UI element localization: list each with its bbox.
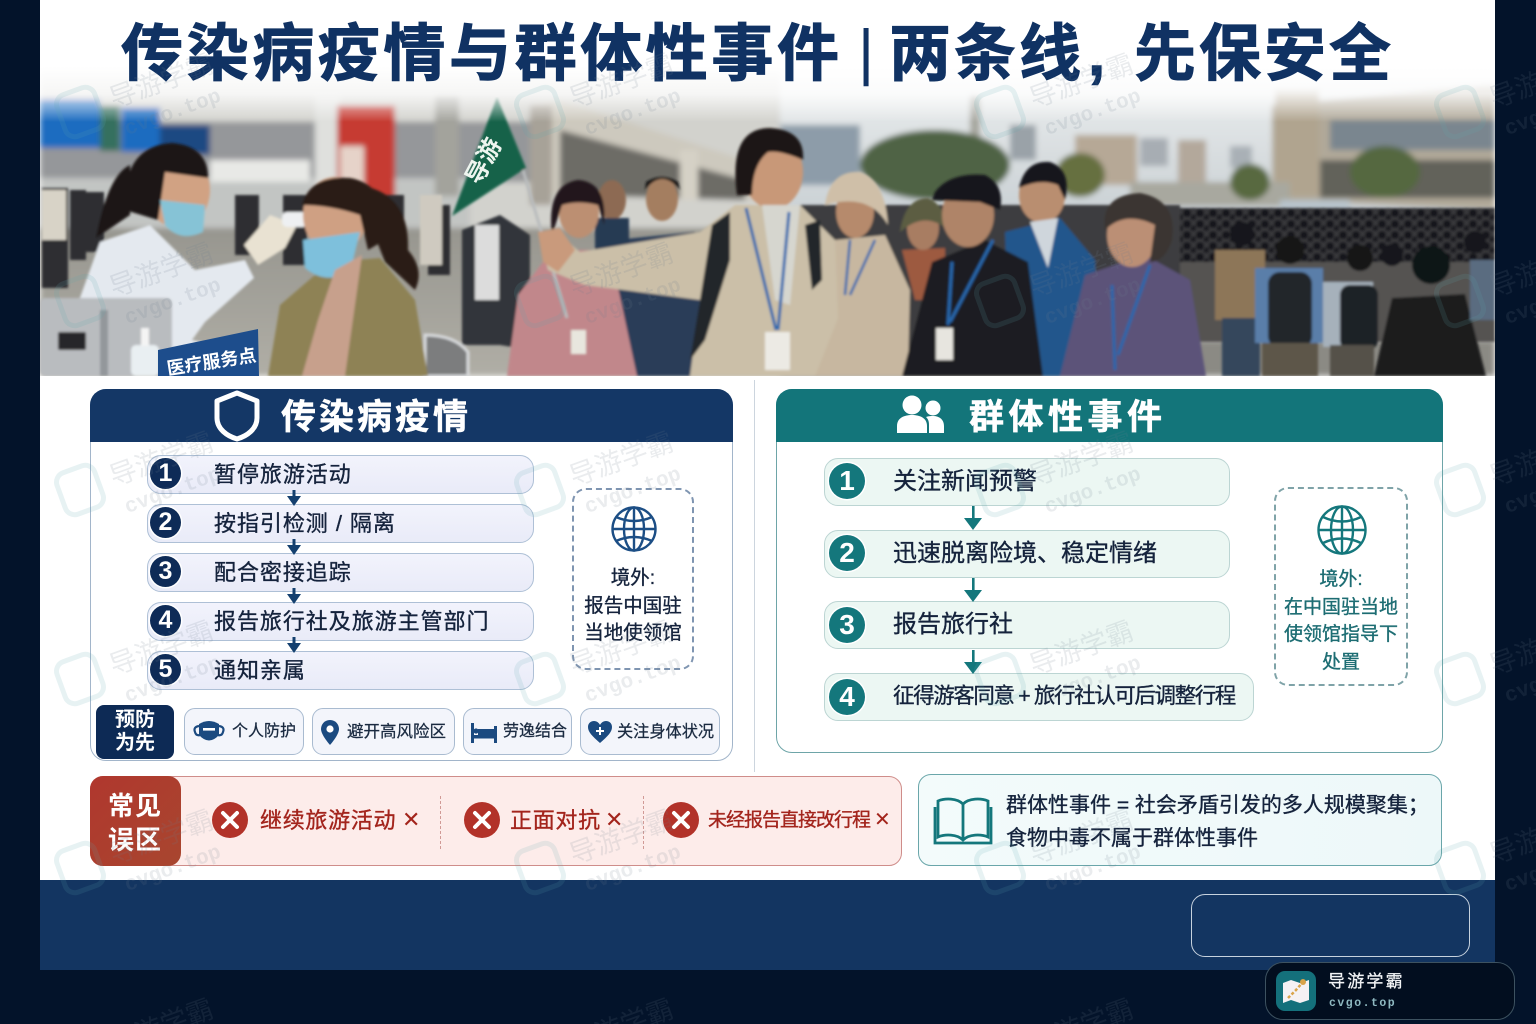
overseas text: 报告中国驻 [584, 594, 682, 616]
panel: definition note [918, 774, 1442, 866]
flag pole and cloth [520, 160, 567, 318]
step 5 number [150, 654, 181, 685]
red banner [337, 105, 395, 205]
step 4 number [829, 679, 865, 715]
step 4 [147, 602, 534, 641]
interior background [40, 66, 780, 376]
step list: group incidents [824, 458, 1254, 721]
definition text [1006, 794, 1429, 850]
watermark layer: cvgo.top [122, 464, 225, 520]
step 1 number: 1 [839, 465, 855, 496]
overseas text [1284, 568, 1398, 672]
heading: group incidents: 群体性事件 [969, 398, 1167, 437]
brand name: 导游学霸 [1328, 972, 1405, 991]
step 3: 报告旅行社 [893, 611, 1013, 638]
watermark layer: 导游学霸 [566, 49, 677, 114]
footer band [40, 880, 1495, 970]
step 5 number: 5 [159, 655, 172, 683]
watermark layer: 导游学霸 [106, 805, 217, 870]
chip: avoid risk areas: 避开高风险区 [347, 723, 446, 741]
mistake 1 [212, 802, 420, 838]
step 4 [824, 673, 1254, 721]
step 4: 报告旅行社及旅游主管部门 [214, 609, 489, 634]
watermark layer: 导游学霸 [106, 238, 217, 303]
outdoor sky and skyline [780, 66, 1495, 216]
step 1 [147, 455, 534, 494]
step 3 number [150, 556, 181, 587]
step 1 number: 1 [159, 459, 172, 487]
step 4 number: 4 [839, 681, 855, 712]
chip: avoid risk areas [312, 708, 455, 755]
canopy [530, 100, 775, 200]
step 1: 关注新闻预警 [893, 468, 1037, 495]
step 4 number [150, 605, 181, 636]
watermark layer: cvgo.top [1042, 653, 1145, 709]
watermark layer: cvgo.top [582, 464, 685, 520]
step list: infectious disease [147, 455, 534, 690]
step 2 number [829, 535, 865, 571]
dashed dividers [440, 796, 441, 849]
heading: infectious disease: 传染病疫情 [281, 398, 471, 437]
step 3: 配合密接追踪 [214, 560, 352, 585]
step 1: 暂停旅游活动 [214, 462, 352, 487]
title: | [858, 18, 874, 87]
watermark layer: cvgo.top [582, 653, 685, 709]
definition text: 食物中毒不属于群体性事件 [1006, 827, 1258, 850]
watermark layer: 导游学霸 [106, 616, 217, 681]
title: 两条线 [889, 20, 1084, 89]
top fade into white [40, 66, 1495, 122]
distant crowd [1160, 208, 1495, 268]
centre divider [754, 380, 755, 772]
mistake 1: 继续旅游活动 [260, 808, 396, 833]
step 2 number [150, 507, 181, 538]
icon: bed [471, 723, 497, 743]
definition text: 群体性事件 = 社会矛盾引发的多人规模聚集； [1006, 794, 1429, 817]
chip: personal protection: 个人防护 [232, 723, 296, 740]
step 2: 按指引检测 / 隔离 [214, 511, 396, 536]
step 5: 通知亲属 [214, 658, 306, 683]
icon: globe [1317, 505, 1367, 555]
chip: watch health: 关注身体状况 [617, 723, 714, 741]
flag text: 导游 [461, 134, 508, 189]
arrows between steps [287, 490, 301, 653]
mistakes label: 误区 [108, 824, 162, 854]
mistake 3 [663, 802, 891, 838]
title: 先保安全 [1134, 20, 1394, 89]
mistakes label [90, 776, 180, 866]
chip: balance work and rest [463, 708, 572, 755]
medical sign [158, 329, 259, 379]
prevention label: 为先 [115, 732, 155, 754]
icon: location pin [321, 720, 339, 745]
step 4 number: 4 [159, 606, 172, 634]
overseas text: 使领馆指导下 [1284, 624, 1398, 645]
interior bystanders [42, 188, 450, 288]
icon: cross [212, 802, 248, 838]
panel: common mistakes [90, 776, 902, 866]
watermark layer: 导游学霸 [566, 427, 677, 492]
tour guide [540, 205, 905, 376]
watermark layer: cvgo.top [122, 86, 225, 142]
chair [425, 335, 468, 376]
title [121, 18, 1394, 89]
watermark layer: cvgo.top [122, 842, 225, 898]
watermark layer: 导游学霸 [106, 49, 217, 114]
watermark layer: cvgo.top [582, 275, 685, 331]
icon: cross [464, 802, 500, 838]
watermark layer: 导游学霸 [1026, 616, 1137, 681]
back-facing crowd [1215, 250, 1265, 320]
title: , [1088, 20, 1109, 89]
patient [355, 185, 419, 290]
overseas text: 在中国驻当地 [1284, 596, 1398, 618]
tourists right [815, 235, 910, 376]
title: 传染病疫情与群体性事件 [121, 20, 843, 89]
prevention label: 预防 [115, 709, 155, 731]
step 3 [147, 553, 534, 592]
mistake 3: 未经报告直接改行程 [708, 810, 870, 831]
chip: balance work and rest: 劳逸结合 [503, 723, 567, 740]
overseas text: 当地使领馆 [584, 622, 682, 644]
step 2 [147, 504, 534, 543]
overseas text: 境外: [611, 567, 655, 589]
overseas text [584, 567, 682, 644]
panel header: infectious disease [90, 389, 733, 442]
watermark layer: cvgo.top [122, 275, 225, 331]
mistake 2: 正面对抗 [510, 808, 601, 833]
watermark layer: cvgo.top [582, 86, 685, 142]
icon: folded map logo [1276, 971, 1316, 1011]
icon: heart [588, 721, 612, 743]
icon: globe [611, 506, 657, 552]
step 3 number [829, 607, 865, 643]
mistake 2 [464, 802, 623, 838]
watermark layer: cvgo.top [1042, 464, 1145, 520]
icon: people [897, 396, 944, 433]
icon: mask [193, 721, 225, 740]
trees [860, 130, 1010, 200]
watermark layer: cvgo.top [1042, 842, 1145, 898]
chip: watch health [580, 708, 720, 755]
watermark layer: cvgo.top [122, 653, 225, 709]
icon: cross [663, 802, 699, 838]
step 1 number [150, 458, 181, 489]
overseas text: 处置 [1322, 652, 1360, 672]
step 2 number: 2 [839, 537, 855, 568]
watermark layer: 导游学霸 [566, 238, 677, 303]
chip: personal protection [184, 708, 304, 755]
watermark layer: cvgo.top [582, 842, 685, 898]
doctor [96, 165, 130, 238]
pink jacket woman [507, 250, 637, 376]
brand badge [1265, 962, 1515, 1020]
watermark layer: 导游学霸 [1026, 49, 1137, 114]
arrows between steps [964, 506, 982, 674]
mistakes label: 常见 [108, 790, 162, 820]
sanitizer [131, 345, 159, 376]
step 4: 征得游客同意 + 旅行社认可后调整行程 [893, 684, 1235, 708]
step 1 [824, 458, 1230, 506]
panel: infectious disease [90, 389, 733, 761]
mistake 2: ✕ [605, 807, 623, 832]
callout: overseas, infectious disease [572, 488, 694, 670]
watermark layer: 导游学霸 [106, 427, 217, 492]
foreground people [40, 97, 1495, 376]
mistake 1: ✕ [402, 807, 420, 832]
icon: shield [214, 390, 260, 442]
footer empty box [1191, 894, 1470, 957]
step 2: 迅速脱离险境、稳定情绪 [893, 540, 1157, 567]
step 2 number: 2 [159, 508, 172, 536]
mistake 3: ✕ [874, 809, 891, 831]
panel header: group incidents [776, 389, 1443, 442]
overseas text: 境外: [1319, 569, 1363, 590]
step 2 [824, 530, 1230, 578]
watermark layer: cvgo.top [1042, 86, 1145, 142]
step 1 number [829, 463, 865, 499]
medical case [40, 298, 172, 376]
step 5 [147, 651, 534, 690]
watermark layer: 导游学霸 [1026, 238, 1137, 303]
step 3 [824, 601, 1230, 649]
watermark layer: cvgo.top [1042, 275, 1145, 331]
watermark layer: 导游学霸 [1026, 427, 1137, 492]
watermark layer: 导游学霸 [566, 616, 677, 681]
prevention label [96, 705, 174, 759]
man behind guide [615, 232, 710, 376]
callout: overseas, group incidents [1274, 487, 1408, 686]
icon: open book [934, 798, 992, 844]
departure boards [40, 98, 210, 155]
photo band: travel safety scene [40, 85, 1495, 376]
step 3 number: 3 [159, 557, 172, 585]
panel: group incidents [776, 389, 1443, 753]
step 3 number: 3 [839, 609, 855, 640]
brand url: cvgo.top [1329, 997, 1396, 1010]
blurred background [40, 66, 1495, 376]
watermark layer: 导游学霸 [566, 805, 677, 870]
watermark layer: 导游学霸 [1026, 805, 1137, 870]
